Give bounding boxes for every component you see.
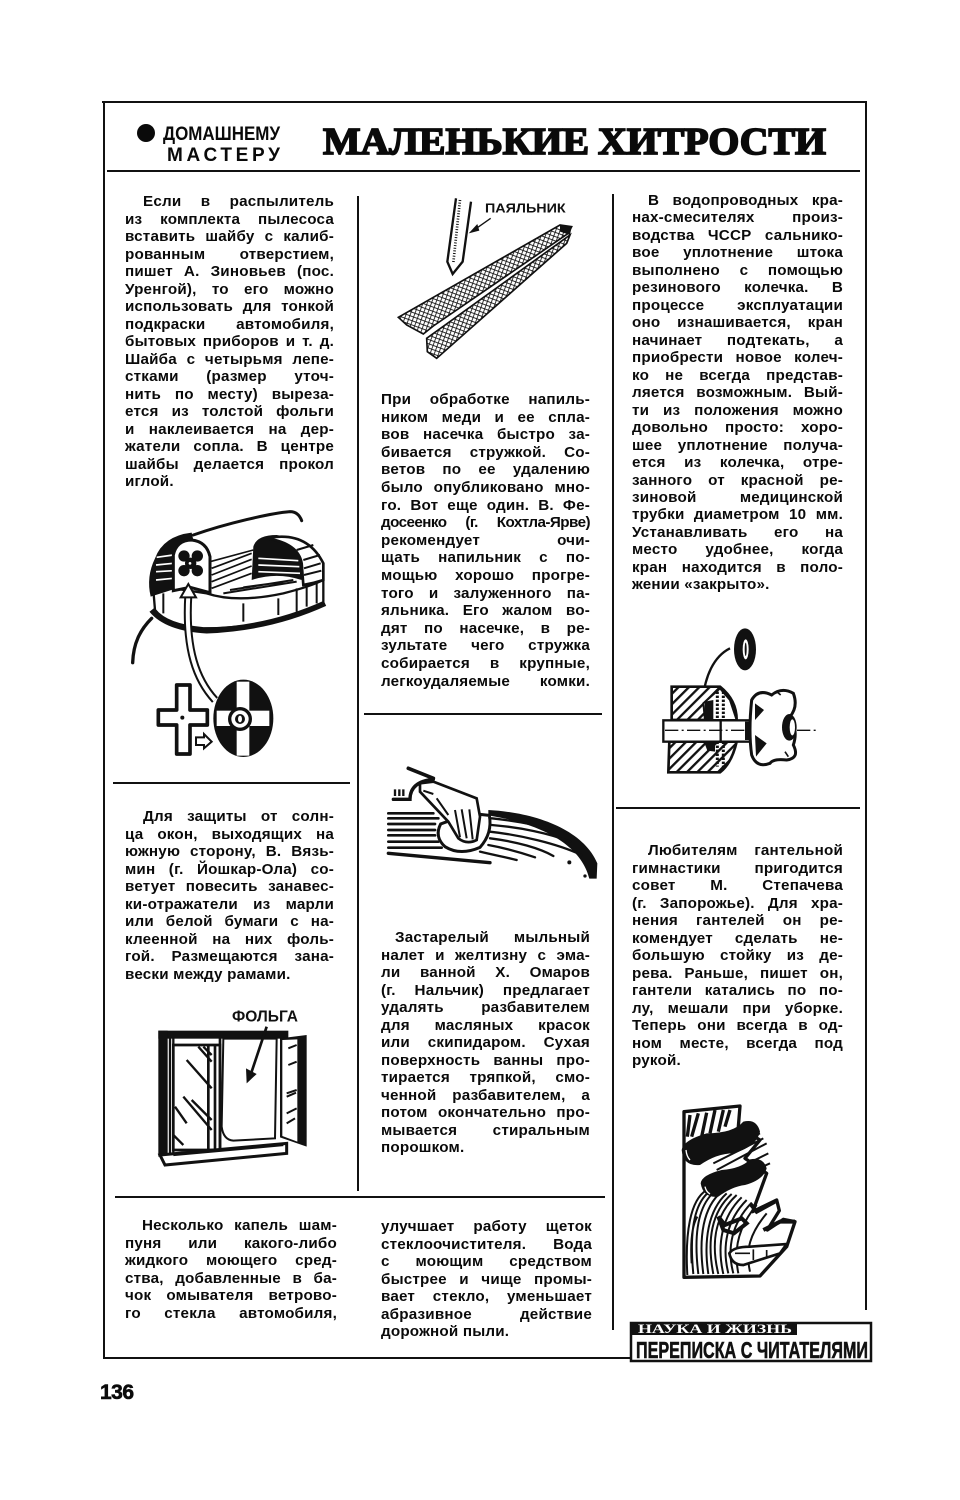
text block: sprayer tip: вставить шайбу с калиб-	[125, 228, 334, 245]
text block: dumbbell stand: Теперь они всегда в од-	[632, 1017, 843, 1034]
text block: mixer taps	[632, 192, 843, 593]
text block: sprayer tip: из комплекта пылесоса	[125, 210, 334, 228]
text block: cleaning a file: мощью хорошо прогре-	[381, 567, 590, 584]
rubric box: readers' correspondence: НАУКА И ЖИЗНЬ	[638, 1322, 792, 1336]
text block: cleaning a file: рекомендует очи-	[381, 532, 590, 549]
text block: mixer taps: кран находится в поло-	[632, 559, 843, 576]
text block: sprayer tip: Уренгой), то его можно	[125, 280, 334, 298]
text block: soap scum in the bathtub: налет и желтизну с эма-	[381, 946, 590, 964]
text block: sprayer tip: иглой.	[125, 473, 174, 490]
text block: mixer taps: ко не всегда представ-	[632, 367, 843, 384]
text block: cleaning a file: бивается стружкой. Со-	[381, 444, 590, 461]
text block: shampoo for windshield, part two: улучшает работу щеток	[381, 1218, 592, 1235]
title: ХИТРОСТИ	[598, 121, 826, 163]
text block: mixer taps: В водопроводных кра-	[648, 192, 843, 209]
text block: dumbbell stand: ном месте, всегда под	[632, 1034, 843, 1052]
text block: window curtains: мин (г. Йошкар-Ола) со-	[125, 860, 334, 878]
text block: shampoo for windshield, part two: быстрее и чище промы-	[381, 1270, 592, 1288]
text block: shampoo for windshield, part two: с моющим средством	[381, 1253, 592, 1270]
text block: sprayer tip: бытовых приборов и т. д.	[125, 333, 334, 350]
text block: dumbbell stand: гантели катались по по-	[632, 982, 843, 999]
text block: sprayer tip	[124, 193, 334, 490]
text block: mixer taps: довольно просто: хоро-	[632, 419, 843, 436]
text block: mixer taps: трубки диаметром 10 мм.	[632, 506, 843, 523]
text block: soap scum in the bathtub: поверхность ванны про-	[381, 1052, 590, 1068]
text block: cleaning a file: досеенко (г. Кохтла-Ярве)	[381, 514, 590, 531]
title: МАЛЕНЬКИЕ	[323, 121, 589, 163]
text block: soap scum in the bathtub: мывается стиральным	[381, 1122, 590, 1138]
rubric box: readers' correspondence: ПЕРЕПИСКА С ЧИТАТЕЛЯМИ	[636, 1337, 868, 1363]
icon: tap cross-section with rubber ring	[662, 628, 816, 774]
text block: sprayer tip: и наклеивается на дер-	[125, 420, 334, 438]
text block: cleaning a file: При обработке напиль-	[381, 391, 590, 408]
text block: shampoo for windshield, part one	[124, 1217, 337, 1322]
text block: dumbbell stand: лу, мешали при уборке.	[632, 1000, 843, 1016]
text block: mixer taps: Устанавливать его на	[632, 524, 843, 541]
text block: cleaning a file: вов насечка быстро за-	[381, 426, 590, 443]
text block: shampoo for windshield, part one: го стекла автомобиля,	[125, 1304, 337, 1322]
text block: sprayer tip: нить по месту) выреза-	[125, 386, 334, 402]
text block: soap scum in the bathtub: Застарелый мыльный	[395, 929, 590, 946]
text block: dumbbell stand: рукой.	[632, 1052, 681, 1069]
text block: dumbbell stand: комендует сделать не-	[632, 930, 843, 946]
text block: sprayer tip: ется из толстой фольги	[125, 403, 334, 420]
text block: window curtains: ца окон, выходящих на	[125, 826, 334, 842]
icon: soldering iron and file	[397, 198, 573, 360]
text block: cleaning a file: было опубликовано мно-	[381, 479, 590, 496]
text block: mixer taps: зиновой медицинской	[632, 489, 843, 506]
text block: sprayer tip: использовать для тонкой	[125, 298, 334, 315]
text block: cleaning a file: дят по насечке, в ре-	[381, 620, 590, 637]
text block: mixer taps: приобрести новое колеч-	[632, 349, 843, 366]
text block: soap scum in the bathtub: порошком.	[381, 1139, 464, 1156]
bullet	[137, 124, 155, 142]
text block: shampoo for windshield, part two: вает стекло, уменьшает	[381, 1288, 592, 1305]
title	[323, 121, 826, 163]
label: foil: ФОЛЬГА	[232, 1008, 298, 1025]
text block: cleaning a file: ником меди и ее спла-	[381, 409, 590, 426]
icon: vacuum sprayer with foil washer	[131, 510, 326, 757]
text block: dumbbell stand: Любителям гантельной	[648, 842, 843, 859]
text block: cleaning a file: собирается в крупные,	[381, 655, 590, 672]
text block: mixer taps: нах-смесителях произ-	[632, 209, 843, 226]
text block: shampoo for windshield, part one: пуня или какого-либо	[125, 1234, 337, 1252]
text block: sprayer tip: Шайба с четырьмя лепе-	[125, 350, 334, 368]
text block: sprayer tip: шайбы делается прокол	[125, 456, 334, 472]
text block: mixer taps: начинает подтекать, а	[632, 332, 843, 349]
text block: mixer taps: оно изнашивается, кран	[632, 314, 843, 331]
text block: dumbbell stand	[632, 842, 843, 1069]
text block: window curtains	[125, 808, 334, 982]
section label	[163, 124, 280, 166]
text block: soap scum in the bathtub: ли ванной Х. Омаров	[381, 964, 590, 981]
section label: МАСТЕРУ	[167, 145, 280, 166]
text block: dumbbell stand: рева. Раньше, пишет он,	[632, 964, 843, 982]
text block: cleaning a file: легкоудаляемые комки.	[381, 672, 590, 690]
text block: shampoo for windshield, part one: Несколько капель шам-	[142, 1217, 337, 1234]
text block: sprayer tip: жатели сопла. В центре	[125, 438, 334, 455]
text block: mixer taps: шее уплотнение получа-	[632, 437, 843, 454]
text block: cleaning a file: ветов по ее удалению	[381, 461, 590, 478]
text block: sprayer tip: подкраски автомобиля,	[125, 316, 334, 332]
page number: 136	[100, 1381, 134, 1404]
text block: mixer taps: занного от красной ре-	[632, 472, 843, 488]
text block: dumbbell stand: (г. Запорожье). Для хра-	[632, 894, 843, 912]
text block: dumbbell stand: совет М. Степачева	[632, 877, 843, 894]
text block: dumbbell stand: большую стойку из де-	[632, 947, 843, 964]
text block: cleaning a file: яльника. Его жалом во-	[381, 602, 590, 619]
icon: window with foil	[158, 1008, 307, 1167]
text block: mixer taps: место удобнее, когда	[632, 541, 843, 558]
text block: sprayer tip: пишет А. Зиновьев (пос.	[125, 263, 334, 280]
text block: mixer taps: вое уплотнение штока	[632, 244, 843, 261]
text block: cleaning a file: го. Вот еще один. В. Фе-	[381, 497, 590, 514]
text block: soap scum in the bathtub: для масляных красок	[381, 1016, 590, 1034]
icon: hand wiping a bathtub	[386, 766, 598, 879]
text block: mixer taps: процессе эксплуатации	[632, 297, 843, 314]
text block: soap scum in the bathtub	[381, 929, 590, 1156]
text block: window curtains: гой. Размещаются зана-	[125, 948, 334, 965]
text block: sprayer tip: стками (размер уточ-	[125, 368, 334, 385]
text block: shampoo for windshield, part two: стеклоочистителя. Вода	[381, 1236, 592, 1252]
text block: window curtains: или белой бумаги с на-	[125, 913, 334, 930]
text block: mixer taps: водства ЧССР сальнико-	[632, 227, 843, 244]
text block: soap scum in the bathtub: потом окончательно про-	[381, 1104, 590, 1121]
icon: wooden dumbbell stand	[682, 1104, 797, 1279]
text block: cleaning a file: щать напильник с по-	[381, 549, 590, 566]
text block: dumbbell stand: гимнастики пригодится	[632, 860, 843, 876]
text block: soap scum in the bathtub: удалять разбавителем	[381, 999, 590, 1016]
label: soldering iron: ПАЯЛЬНИК	[485, 201, 567, 216]
text block: soap scum in the bathtub: тирается тряпкой, смо-	[381, 1069, 590, 1086]
text block: sprayer tip: Если в распылитель	[143, 193, 334, 210]
text block: window curtains: вески между рамами.	[125, 966, 291, 982]
text block: window curtains: ветует повесить занавес-	[125, 878, 334, 895]
text block: mixer taps: выполнено с помощью	[632, 262, 843, 279]
text block: shampoo for windshield, part two: абразивное действие	[381, 1306, 592, 1322]
text block: mixer taps: ти из положения можно	[632, 402, 843, 419]
text block: cleaning a file: зультате чего стружка	[381, 637, 590, 654]
text block: mixer taps: резинового колечка. В	[632, 279, 843, 296]
text block: window curtains: клеенной на них фоль-	[125, 930, 334, 948]
text block: window curtains: Для защиты от солн-	[143, 808, 334, 825]
text block: soap scum in the bathtub: или скипидаром. Сухая	[381, 1034, 590, 1051]
text block: shampoo for windshield, part one: чок омывателя ветрово-	[125, 1287, 337, 1304]
text block: soap scum in the bathtub: ченной разбавителем, а	[381, 1086, 590, 1104]
text block: window curtains: южную сторону, В. Вязь-	[125, 843, 334, 860]
text block: mixer taps: жении «закрыто».	[632, 576, 770, 593]
section label: ДОМАШНЕМУ	[163, 124, 280, 145]
text block: mixer taps: ляется возможным. Вый-	[632, 384, 843, 401]
text block: cleaning a file	[381, 391, 590, 690]
text block: window curtains: ки-отражатели из марли	[125, 896, 334, 912]
text block: soap scum in the bathtub: (г. Нальчик) предлагает	[381, 982, 590, 998]
text block: shampoo for windshield, part two	[381, 1218, 592, 1340]
text block: shampoo for windshield, part two: дорожной пыли.	[381, 1323, 509, 1340]
text block: shampoo for windshield, part one: ства, добавленные в ба-	[125, 1270, 337, 1286]
text block: dumbbell stand: нения гантелей он ре-	[632, 912, 843, 929]
rubric box: readers' correspondence	[630, 1322, 872, 1363]
header: section label and title	[137, 121, 826, 166]
text block: sprayer tip: рованным отверстием,	[125, 246, 334, 262]
text block: cleaning a file: того и залуженного па-	[381, 585, 590, 602]
text block: shampoo for windshield, part one: жидкого моющего сред-	[125, 1252, 337, 1269]
text block: mixer taps: ется из колечка, отре-	[632, 454, 843, 471]
